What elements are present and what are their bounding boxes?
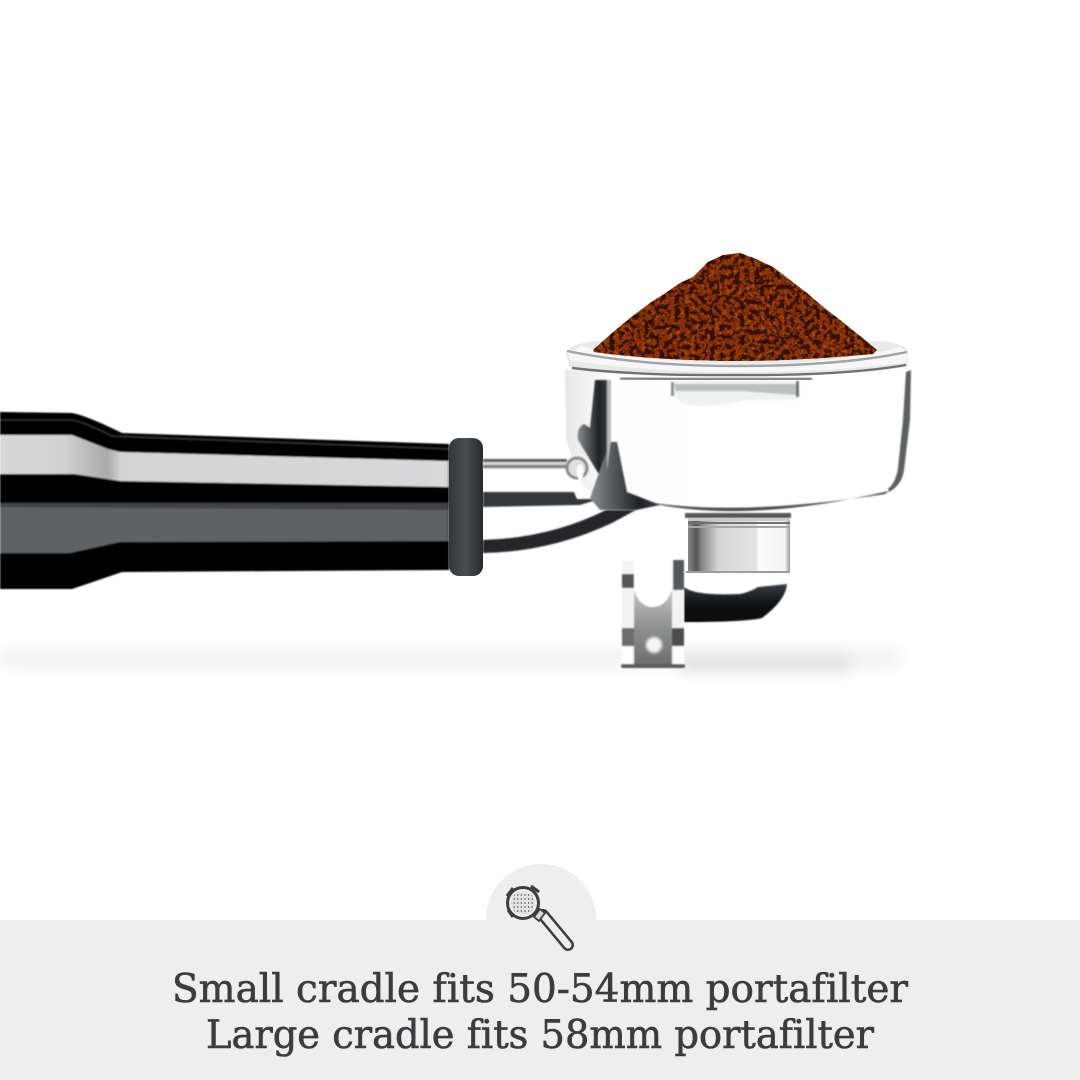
basket rim (566, 341, 908, 379)
basket handle bracket (567, 380, 660, 510)
cradle (621, 558, 685, 668)
photo: portafilter with coffee (0, 253, 911, 668)
basket right edge (888, 370, 911, 492)
infographic canvas (0, 253, 1080, 1080)
icon badge (486, 864, 596, 974)
connecting arms (483, 459, 636, 553)
spout (684, 513, 791, 622)
icon: portafilter (507, 886, 568, 945)
caption panel (0, 864, 1080, 1080)
basket body (565, 370, 911, 512)
ground coffee pile (593, 253, 877, 361)
pivot ring (567, 458, 587, 478)
caption text: Small cradle fits 50-54mm portafilter (172, 967, 908, 1012)
caption panel: Large cradle fits 58mm portafilter (206, 1013, 874, 1058)
basket bottom edge (620, 491, 889, 511)
handle collar (449, 438, 483, 576)
basket spring clip (670, 381, 800, 406)
handle (0, 412, 449, 589)
ground shadow (0, 650, 900, 670)
